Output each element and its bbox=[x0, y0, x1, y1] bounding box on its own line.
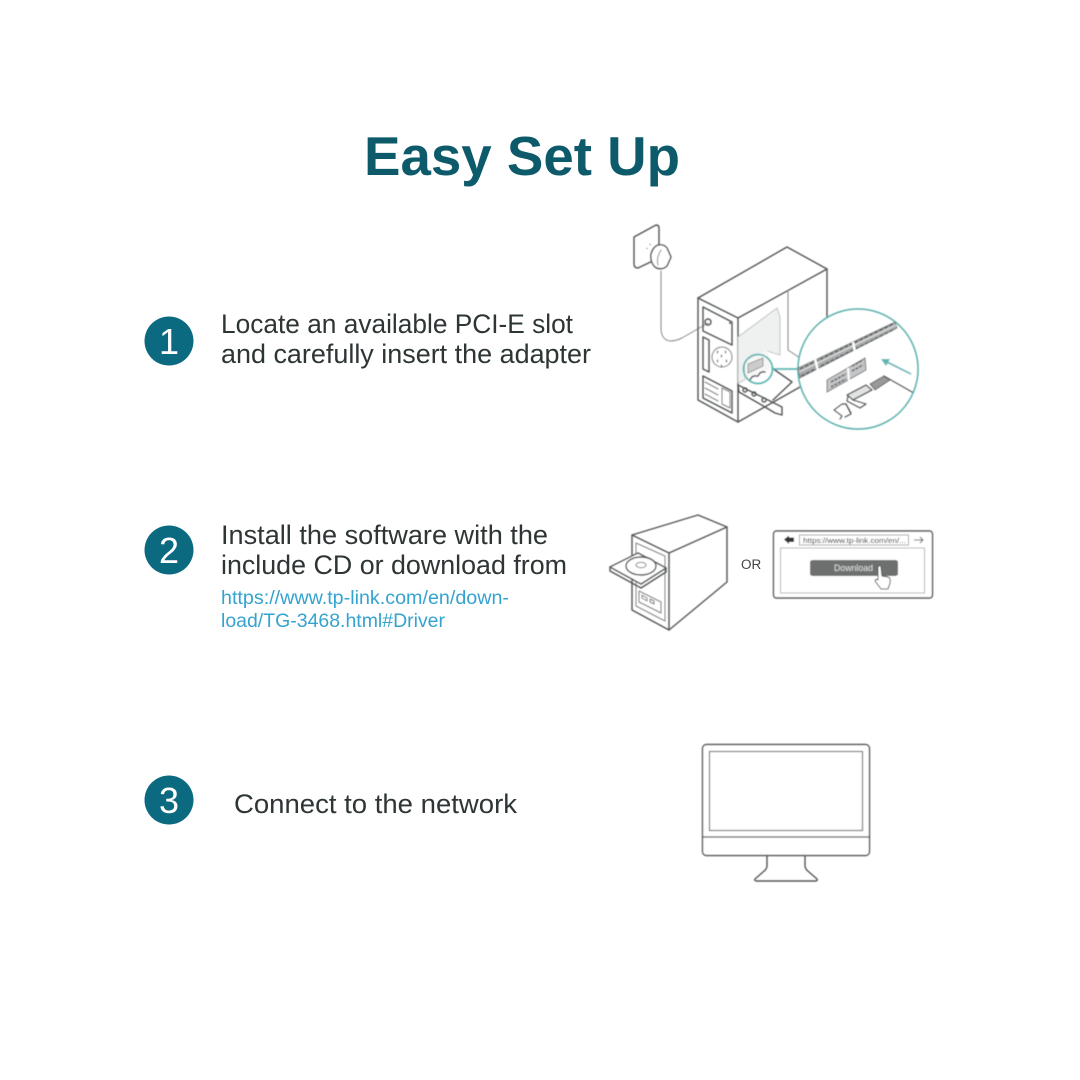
illustration: browser download window bbox=[774, 531, 932, 598]
step 2 instructions: include CD or download from bbox=[221, 550, 567, 580]
illustration: tower with CD drive bbox=[610, 515, 727, 630]
step 2 instructions bbox=[221, 520, 567, 580]
icon: wall outlet and plug bbox=[634, 225, 708, 341]
step 1 instructions bbox=[221, 309, 591, 369]
step 1 bbox=[144, 225, 918, 429]
step 1 number badge: 1 bbox=[159, 321, 179, 362]
step 3 instructions: Connect to the network bbox=[234, 789, 517, 819]
icon: desktop monitor bbox=[702, 744, 870, 881]
icon: pointing hand cursor bbox=[875, 566, 890, 589]
step 3 number badge: 3 bbox=[159, 780, 179, 821]
download link: load/TG-3468.html#Driver bbox=[221, 610, 445, 632]
step 1 instructions: and carefully insert the adapter bbox=[221, 339, 591, 369]
step 1 number badge bbox=[144, 316, 194, 366]
step 1 instructions: Locate an available PCI-E slot bbox=[221, 309, 573, 339]
icon: computer tower bbox=[698, 247, 827, 422]
step 3 number badge bbox=[144, 776, 194, 824]
callout: small highlight circle and connector bbox=[744, 354, 799, 384]
title: Easy Set Up bbox=[364, 125, 680, 187]
step 2 number badge bbox=[144, 526, 194, 574]
download link bbox=[221, 587, 509, 632]
illustration: browser download window: Download bbox=[834, 563, 873, 574]
step 3 bbox=[144, 744, 870, 881]
step 2 instructions: Install the software with the bbox=[221, 520, 548, 550]
callout: magnified PCI-E slot view bbox=[798, 309, 918, 429]
step 2 bbox=[144, 515, 932, 632]
icon: CD tray bbox=[610, 553, 666, 588]
step 2 number badge: 2 bbox=[159, 530, 179, 571]
download link: https://www.tp-link.com/en/down- bbox=[221, 587, 509, 609]
illustration: browser download window: https://www.tp-link.com/en/... bbox=[803, 536, 906, 545]
icon: PCI-E adapter card bbox=[738, 358, 792, 415]
illustration: PC tower with adapter insertion bbox=[634, 225, 918, 429]
OR label: OR bbox=[741, 557, 762, 572]
